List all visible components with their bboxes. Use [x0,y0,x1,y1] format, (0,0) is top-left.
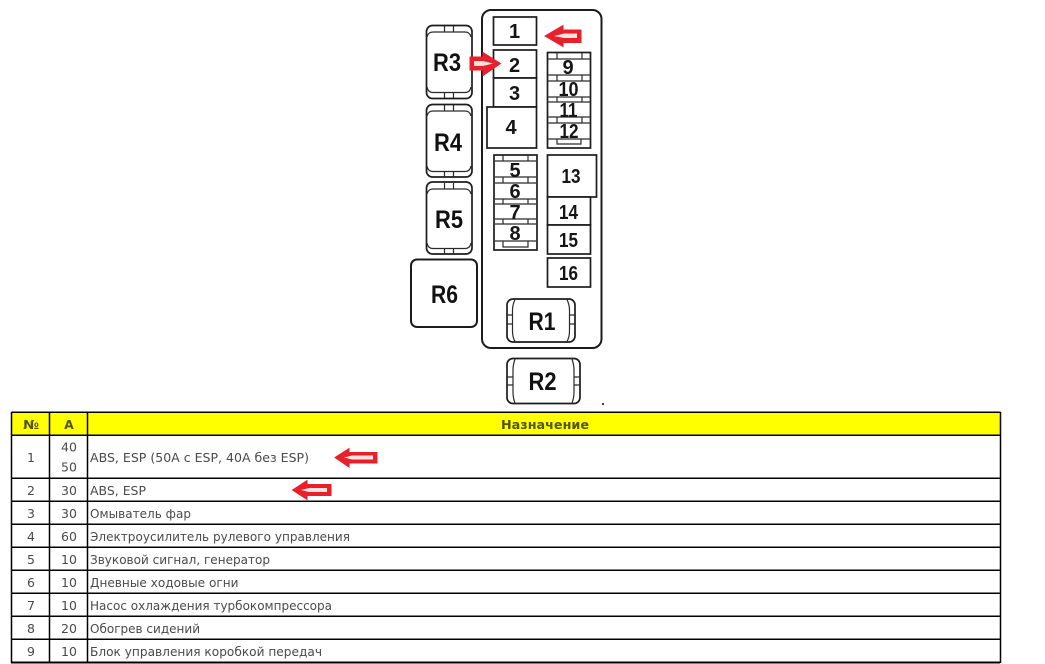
fuse 14: 14 [559,202,579,224]
fuse 3 [494,78,536,107]
arrow: pointing at fuse 1 [545,26,581,46]
fuse 15 [548,225,590,254]
arrow: pointing at fuse 2 [470,52,500,76]
fuse block 5-8: 5 [509,160,521,182]
row 8: 20 [61,621,77,636]
relay R6 [411,260,477,327]
relay R5 [426,182,472,254]
relay R2: R2 [528,368,556,396]
table header text: А [64,417,74,432]
row 5: 5 [27,552,35,567]
row 4: 60 [61,529,77,544]
relay R4: R4 [434,129,462,157]
row 8: 8 [27,621,35,636]
relay R3: R3 [433,49,461,77]
relay R2 [507,358,580,404]
row 3: Омыватель фар [90,506,191,521]
fuse block 9-12: 9 [562,57,574,79]
small red dot [602,403,604,405]
fuse 13: 13 [562,166,580,188]
fuse 3: 3 [509,83,520,105]
relay R1 [507,299,575,342]
fuse 4 [487,107,536,148]
row 5: 10 [61,552,77,567]
fuse block 5-8 [494,155,537,250]
arrow: pointing at row 1 [335,448,377,467]
relay R6: R6 [431,281,458,309]
fuse 14 [548,197,590,225]
fuse block 9-12: 12 [560,121,578,143]
row 8: Обогрев сидений [90,621,200,636]
relay R4 [426,104,472,177]
row 1: 1 [27,450,35,465]
row 1: 40 [61,440,77,454]
fuse block 9-12: 10 [558,79,578,101]
row 2: ABS, ESP [90,483,146,498]
fuse block 5-8: 8 [509,223,521,245]
arrow: pointing at row 2 [292,480,331,500]
table header band [11,412,1000,436]
row 7: 10 [61,598,77,613]
row 2: 2 [27,483,35,498]
table header text: № [23,417,39,432]
row 3 [27,506,191,521]
fuse block 9-12: 11 [560,100,578,122]
table header text: Назначение [501,417,589,432]
fuse 1 [494,17,536,45]
fuse 4: 4 [505,117,517,139]
fuse box diagram [411,10,604,405]
fuse table [11,412,1000,663]
relay R3 [426,26,472,98]
row 6: 10 [61,575,77,590]
fuse 15: 15 [559,230,578,252]
relay R5: R5 [435,206,463,234]
fuse block 5-8: 7 [509,202,521,224]
main fuse panel outline [482,10,602,348]
fuse block 5-8: 6 [509,181,521,203]
table grid [12,412,1000,663]
row 2: 30 [61,483,77,498]
row 9: 10 [61,644,77,659]
row 7: 7 [27,598,35,613]
row 6 [27,575,238,590]
row 6: Дневные ходовые огни [90,575,238,590]
fuse block 9-12 [548,52,590,148]
row 4: Электроусилитель рулевого управления [90,529,350,544]
row 6: 6 [27,575,35,590]
row 9: Блок управления коробкой передач [90,644,322,659]
row 1 [27,440,309,474]
fuse 16 [548,258,590,287]
row 3: 3 [27,506,35,521]
fuse 16: 16 [559,263,578,285]
row 4: 4 [27,529,35,544]
relay R1: R1 [528,308,556,336]
fuse 13 [548,155,596,197]
row 5: Звуковой сигнал, генератор [90,552,270,567]
row 2 [27,483,146,498]
row 8 [27,621,200,636]
row 7: Насос охлаждения турбокомпрессора [90,598,332,613]
fuse 2: 2 [509,55,520,77]
row 1: 50 [61,460,77,474]
fuse 2 [494,50,536,78]
fuse 1: 1 [509,21,520,43]
table header text [23,417,589,432]
row 3: 30 [61,506,77,521]
row 1: ABS, ESP (50A с ESP, 40A без ESP) [90,450,309,465]
row 9: 9 [27,644,35,659]
